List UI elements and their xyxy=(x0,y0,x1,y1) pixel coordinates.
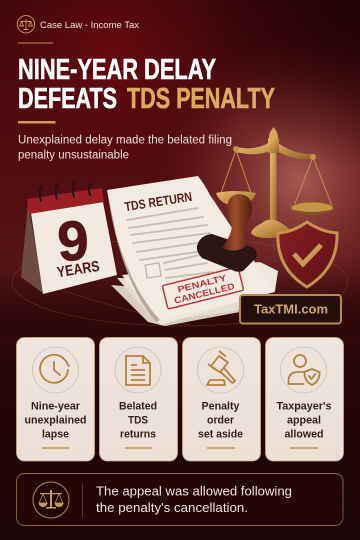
title: NINE-YEAR DELAY xyxy=(18,54,216,86)
stamp mark: penalty cancelled xyxy=(162,267,244,309)
illustration: gold scales xyxy=(216,127,333,238)
floor ellipse lines xyxy=(12,238,348,326)
card text: allowed xyxy=(284,428,324,440)
card text: Penalty xyxy=(202,400,240,412)
card: belated returns xyxy=(100,338,178,461)
title xyxy=(18,54,275,115)
card text xyxy=(198,400,243,440)
illustration: shield with check xyxy=(278,222,337,287)
card text: order xyxy=(207,414,235,426)
panel: conclusion xyxy=(16,474,343,526)
calendar number: 9 xyxy=(56,208,90,273)
calendar label: YEARS xyxy=(56,258,101,281)
icon: scales xyxy=(33,482,69,518)
card text: appeal xyxy=(287,414,321,426)
right pan xyxy=(291,202,333,214)
icon: clock xyxy=(40,355,69,383)
card text: lapse xyxy=(42,428,69,440)
card text xyxy=(119,400,157,440)
subtitle: penalty unsustainable xyxy=(18,150,129,162)
checkbox xyxy=(145,263,161,278)
header label: case law xyxy=(17,16,139,33)
card text: Belated xyxy=(119,400,157,412)
title: DEFEATS xyxy=(18,83,117,115)
icon: person with shield xyxy=(288,355,320,385)
card: nine-year lapse xyxy=(16,338,94,461)
card: penalty order xyxy=(182,338,260,461)
illustration: calendar xyxy=(21,182,117,294)
card text: set aside xyxy=(198,428,243,440)
badge: TaxTMI.com: TaxTMI.com xyxy=(254,302,328,316)
stamp mark: penalty cancelled: PENALTY xyxy=(176,273,227,295)
illustration: rubber stamp xyxy=(197,194,257,272)
card text xyxy=(276,400,332,440)
subtitle: Unexplained delay made the belated filing xyxy=(18,134,232,146)
conclusion text: The appeal was allowed following xyxy=(96,484,292,498)
beam xyxy=(236,143,314,159)
document heading: TDS RETURN xyxy=(124,189,193,214)
card text: returns xyxy=(120,428,156,440)
card text: Taxpayer's xyxy=(276,400,332,412)
icon: document xyxy=(126,356,150,385)
icon: gavel xyxy=(207,351,235,385)
conclusion text: the penalty's cancellation. xyxy=(96,501,248,515)
card text: unexplained xyxy=(24,414,86,426)
stamp mark: penalty cancelled: CANCELLED xyxy=(173,281,236,306)
card text xyxy=(24,400,86,440)
card text: Nine-year xyxy=(31,400,81,412)
icon: scales badge xyxy=(17,16,35,33)
conclusion text xyxy=(96,484,292,515)
left pan xyxy=(216,191,256,206)
check mark xyxy=(294,245,321,264)
badge: TaxTMI.com xyxy=(240,295,341,324)
card text: TDS xyxy=(128,414,148,426)
title: TDS PENALTY xyxy=(127,83,275,115)
illustration: TDS return document xyxy=(107,176,278,326)
post xyxy=(270,146,276,228)
document lines xyxy=(127,208,217,278)
subtitle xyxy=(18,134,232,162)
base xyxy=(251,220,291,238)
label text: Case Law - Income Tax xyxy=(40,20,139,30)
card: appeal allowed xyxy=(266,338,344,461)
